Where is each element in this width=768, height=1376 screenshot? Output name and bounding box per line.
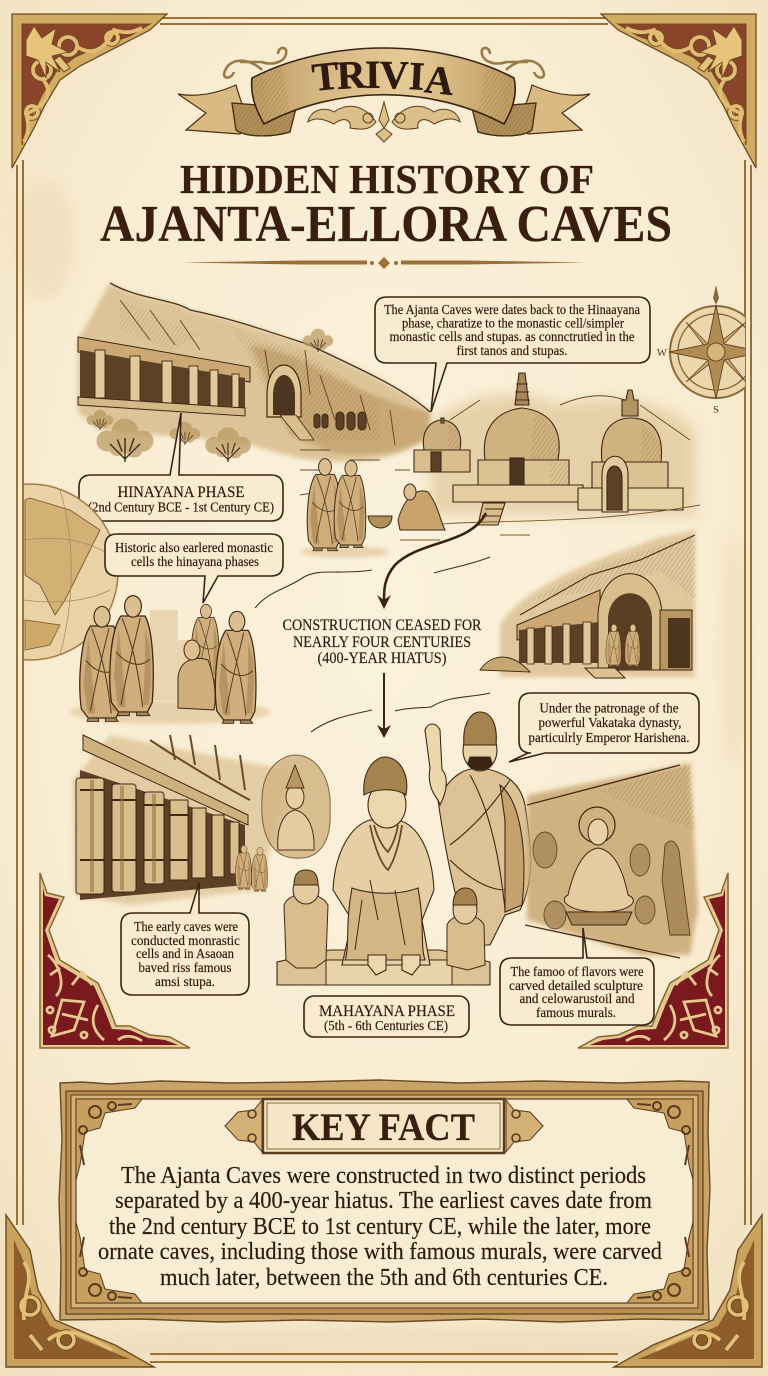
- main title: HIDDEN HISTORY OF: [180, 156, 594, 202]
- callout: Mahayana phase label: MAHAYANA PHASE: [319, 1003, 455, 1020]
- panel corner ornaments: [76, 1099, 693, 1303]
- title word: Trivia: T: [310, 52, 341, 100]
- key fact body text: [98, 1163, 662, 1291]
- illustration: standing emperor: [425, 712, 531, 945]
- callout: Hinayana phase label: (2nd Century BCE - 1st Century CE): [88, 500, 274, 514]
- throne: [277, 950, 490, 985]
- key fact body text: the 2nd century BCE to 1st century CE, while the later, more: [109, 1214, 651, 1240]
- key fact body text: much later, between the 5th and 6th centuries CE.: [160, 1265, 608, 1291]
- callout: patronage: [509, 693, 699, 762]
- callout: Ajanta caves dating: monastic cells and stupas. as connctrutied in the: [390, 329, 635, 344]
- callout: Ajanta caves dating: phase, charatize to the monastic cell/simpler: [402, 316, 624, 330]
- main title: [100, 156, 672, 253]
- illustration: monks group: [70, 596, 270, 724]
- ornament under banner: [308, 102, 460, 142]
- hiatus text: CONSTRUCTION CEASED FOR: [282, 617, 482, 634]
- callout: early caves: cells and in Asaoan: [136, 946, 234, 961]
- title divider: [182, 257, 586, 269]
- title word: Trivia: I: [408, 53, 426, 99]
- callout: early caves: amsi stupa.: [155, 974, 215, 989]
- title word: Trivia: I: [365, 52, 381, 97]
- pillared cave facade: [78, 337, 250, 382]
- key fact body text: ornate caves, including those with famous murals, were carved: [98, 1239, 662, 1265]
- callout: monastic cells: cells the hinayana phases: [131, 554, 259, 569]
- kneeling monk with bowl: [368, 484, 445, 530]
- stupa centre: [453, 373, 583, 525]
- arrow: straight down to Mahayana: [377, 673, 391, 738]
- key fact heading plate: [225, 1099, 543, 1153]
- illustration: Buddha mural: [525, 763, 698, 958]
- callout: murals: and celowarustoil and: [520, 991, 635, 1006]
- red corner bottom-right of scene: [578, 873, 728, 1048]
- panel: key fact: [59, 1080, 710, 1322]
- illustration: pillared hall: [73, 735, 330, 905]
- hiatus text: (400-YEAR HIATUS): [318, 650, 446, 667]
- cliff wash: [78, 283, 430, 462]
- ornament scrolls above: [224, 48, 544, 78]
- globe map: [24, 483, 118, 661]
- red corner bottom-left of scene: [40, 873, 190, 1048]
- key fact body text: separated by a 400-year hiatus. The earliest caves date from: [115, 1188, 652, 1214]
- chaitya arch: [267, 365, 301, 417]
- corner ornament bottom-right: [614, 1215, 762, 1367]
- callout: Hinayana phase label: HINAYANA PHASE: [118, 484, 244, 501]
- title word: Trivia: A: [423, 56, 456, 104]
- stupa right: [578, 390, 683, 512]
- seated monk: [178, 640, 215, 710]
- callout: Ajanta caves dating: The Ajanta Caves were dates back to the Hinaayana: [384, 302, 640, 317]
- callout: patronage: Under the patronage of the: [540, 702, 678, 716]
- hiatus text: NEARLY FOUR CENTURIES: [293, 634, 471, 651]
- illustration: Ajanta rock cliff and caves: [78, 283, 430, 495]
- corner ornament top-left: [12, 14, 167, 168]
- arrow: curved from stupas to hiatus: [377, 513, 486, 609]
- ribbon banner: [178, 48, 590, 142]
- key fact body text: The Ajanta Caves were constructed in two distinct periods: [121, 1163, 646, 1189]
- callout: murals: carved detailed sculpture: [509, 978, 643, 993]
- small praying attendants: [284, 870, 485, 970]
- callout: murals: The famoo of flavors were: [510, 964, 644, 979]
- callout: early caves: conducted monrastic: [131, 933, 240, 948]
- callout: monastic cells: [105, 534, 283, 603]
- callout: early caves: baved riss famous: [138, 960, 232, 975]
- callout: patronage: powerful Vakataka dynasty,: [538, 716, 682, 731]
- key fact heading plate: KEY FACT: [292, 1106, 475, 1149]
- corner ornament bottom-left: [6, 1215, 154, 1367]
- illustration: seated king on throne: [277, 757, 490, 985]
- stupa left: [414, 418, 470, 472]
- main title: AJANTA-ELLORA CAVES: [100, 196, 672, 253]
- illustration: later cave with arch: [480, 530, 695, 678]
- callout: Hinayana phase label: [79, 413, 283, 521]
- ribbon centre: [252, 48, 515, 124]
- callout: early caves: [121, 883, 249, 995]
- callout: Mahayana phase label: (5th - 6th Centuries CE): [324, 1018, 448, 1033]
- callout: Mahayana phase label: [304, 996, 469, 1037]
- compass rose: [656, 285, 745, 413]
- title word: Trivia: R: [336, 51, 368, 98]
- callout: murals: famous murals.: [536, 1005, 616, 1020]
- terrain lines: [255, 557, 490, 732]
- corner ornament top-right: [601, 14, 756, 168]
- callout: Ajanta caves dating: first tanos and stupas.: [456, 343, 568, 358]
- title word: Trivia: V: [379, 52, 409, 98]
- callout: early caves: The early caves were: [134, 919, 238, 934]
- relief bodhisattva: [262, 755, 330, 858]
- callout: murals: [500, 928, 654, 1025]
- illustration: three stupas: [400, 373, 700, 540]
- ribbon tails: [178, 85, 590, 136]
- compass rose: S: [713, 404, 719, 416]
- callout: patronage: particulrly Emperor Harishena.: [528, 731, 690, 746]
- callout: Ajanta caves dating: [375, 297, 650, 412]
- hiatus text: [282, 617, 482, 667]
- small cave windows: [314, 412, 366, 430]
- compass rose: W: [657, 347, 668, 359]
- monks at stupa: [300, 459, 445, 558]
- callout: monastic cells: Historic also earlered monastic: [115, 540, 273, 555]
- shrubs: [87, 329, 333, 462]
